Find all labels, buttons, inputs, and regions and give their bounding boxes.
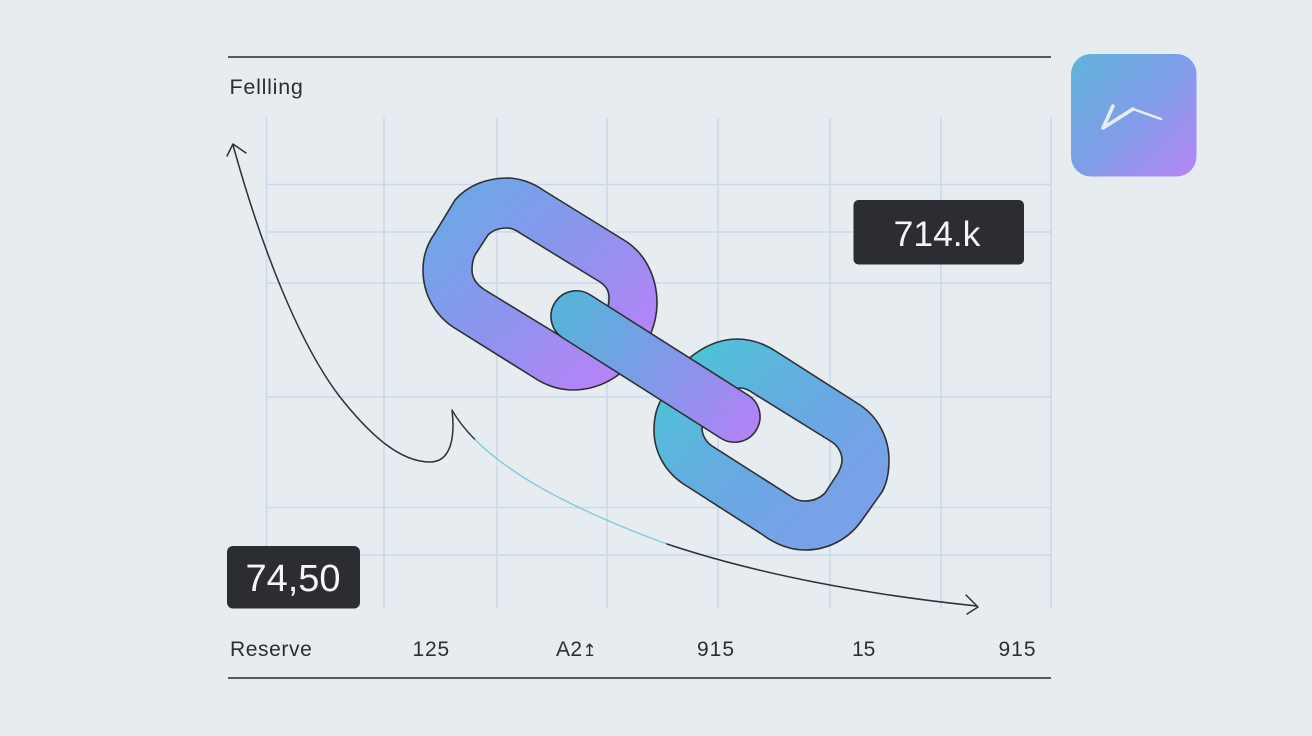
icon tile: trend glyph [1071,54,1196,176]
arrow: horizontal axis curve [667,544,978,614]
curve: light blue segment [452,410,667,544]
axis labels: 15 [852,638,875,661]
value badge: 74,50 [227,546,360,608]
value badge: 74,50: 74,50 [245,558,341,600]
chain link: connecting bar [551,291,760,442]
axis labels: 915 [697,638,735,661]
grid [266,118,1051,608]
chain link: upper blue-violet [423,178,657,390]
value badge: 714.k [854,200,1024,264]
top rule [228,56,1051,58]
axis labels [230,638,1037,661]
heading: Fellling: Fellling [230,75,304,99]
axis labels: 125 [412,638,450,661]
axis labels: A2↥ [556,638,597,661]
bottom rule [228,677,1051,679]
arrow: vertical axis curve [227,144,453,462]
value badge: 714.k: 714.k [894,214,981,254]
axis labels: 915 [998,638,1037,661]
chain link: lower teal-blue [654,339,889,550]
curve: dark start of the light segment [452,410,475,439]
axis labels: Reserve [230,638,312,661]
